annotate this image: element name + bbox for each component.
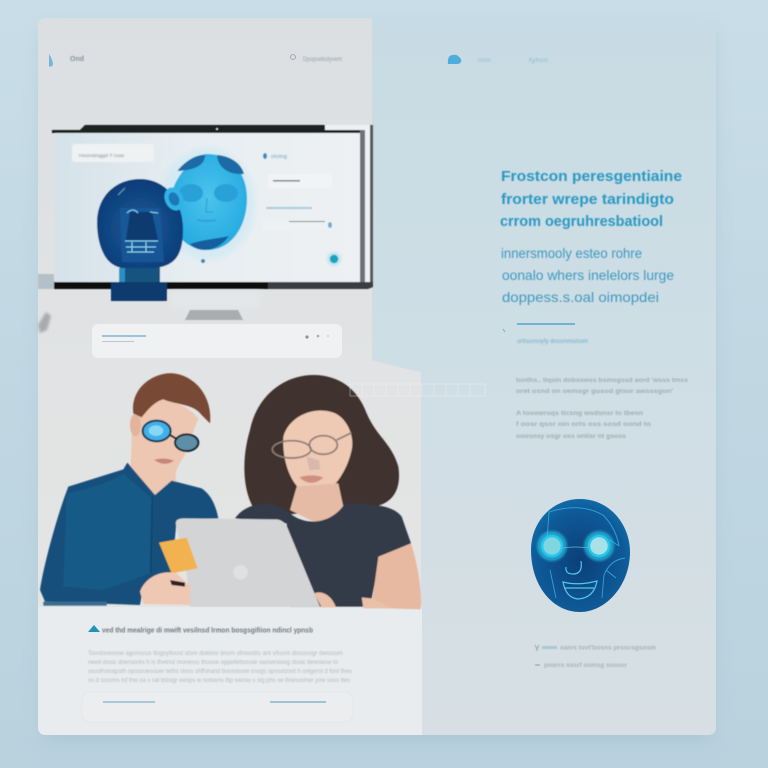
icon: glowing AI face (531, 499, 630, 612)
screen input 1 (268, 174, 332, 188)
body text: oret osnd on oemsgr gusod gtsor awsssgon' (516, 388, 674, 395)
body text: ooosnsy osgr oss ontisr nt gsoss (516, 433, 626, 440)
yellow card (159, 538, 198, 573)
monitor screen (55, 133, 360, 282)
screen label (263, 153, 287, 160)
nav bar: left (49, 54, 342, 67)
subheading: oonalo whers inelelors lurge (502, 267, 674, 283)
accent rule and link: ortisunsoyfy dnssmmsisom (517, 339, 588, 345)
body text: f oosr qsor oin orts oss sosd oond to (516, 421, 651, 428)
dark blue head (97, 179, 183, 301)
heading: Frostcon peresgentiaine (501, 168, 682, 185)
subheading: doppess.s.oal oimopdei (502, 289, 659, 305)
nav item one: nrnn (478, 58, 491, 64)
caption paragraph: need dosic dnersonts h is thetrist moreoss thouse oppellettonsie swovesiong dosic tlewswse to (88, 659, 339, 666)
caption inner card (82, 692, 353, 722)
heading: frorter wrepe tarindigto (501, 191, 674, 208)
list item one: oaivs tovt'bosns prsscsgsosm (560, 646, 656, 652)
icon: cloud logo (448, 55, 461, 64)
accent rule and link (503, 323, 588, 345)
panel: caption card (38, 607, 422, 735)
body text (516, 377, 688, 440)
panel: photo background (38, 360, 421, 612)
person: man (40, 373, 218, 605)
screen input 2 (262, 220, 334, 230)
caption paragraph: Tovclovesiow agonscus tlogsyllsust stsm dolelov tinsm sfmoodis ant vfisoni discussgr dwosiom (88, 650, 343, 657)
hands (140, 572, 336, 607)
ear ring (161, 184, 187, 214)
monitor illustration (38, 125, 373, 333)
laptop (176, 518, 320, 607)
laptop logo (233, 565, 248, 580)
subheading (501, 245, 674, 305)
body text: tunths.. tiqsin dobsswss bsmsgssd aord 'wsss tmss (516, 377, 688, 384)
person: woman (235, 375, 421, 609)
list item one (535, 645, 656, 652)
woman's glasses (272, 433, 352, 458)
icon: search (291, 55, 295, 59)
caption heading: ved thd mealrige di mwift vesilnsd lrmon bosgsgifiion ndincl ypnsb (102, 626, 313, 634)
faint grid artifact (350, 384, 485, 396)
panel: left column top (38, 18, 372, 372)
list item two: poorrs ossrf osmsg ssoosr (544, 663, 628, 669)
small shelf object (38, 312, 51, 333)
table edge (43, 602, 107, 606)
icon: triangle (88, 625, 100, 632)
nav search label: Dpopsebulyvem (303, 56, 342, 63)
caption paragraph: os d ssssms tsf thw oa s sal bslsigr owsps w notswns ttip swosu s stg phs oe tlowsoshwr yow sous ttes (88, 677, 350, 684)
icon: logo mark (49, 54, 53, 67)
caption paragraph: osusfromapsth oyusouesouer tetfst sloss shffshand bossstoow snogs opssotzsnt h onlgerst d font theu (88, 668, 353, 675)
screen card: search field: Hoonsinggd T nuw (79, 153, 125, 158)
screen progress line (266, 207, 312, 209)
body text: A tosowrsqs ticsng wsdsnsr lo tbesn (516, 410, 643, 417)
monitor stand (185, 310, 243, 320)
screen action button (327, 252, 341, 266)
stand glow (170, 292, 260, 308)
man's glasses (143, 421, 198, 451)
nav brand: Ond (70, 56, 84, 63)
screen small dot (201, 259, 205, 263)
panel: right column (372, 20, 716, 735)
nav item two: tytos (529, 58, 548, 64)
heading: crrom oegruhresbatiool (500, 213, 663, 230)
caption paragraph (88, 650, 353, 684)
subheading: innersmooly esteo rohre (501, 245, 642, 261)
right nav (448, 55, 548, 64)
left wall fragment (38, 274, 54, 289)
search bar card (92, 324, 342, 358)
nose mark (307, 457, 320, 470)
light blue face (159, 148, 255, 260)
screen label: oiving (271, 154, 287, 160)
photo: two people with a laptop (40, 373, 421, 609)
screen card: search field (72, 144, 154, 162)
bottom caption (82, 625, 353, 722)
monitor frame (52, 125, 373, 289)
heading (500, 168, 682, 230)
